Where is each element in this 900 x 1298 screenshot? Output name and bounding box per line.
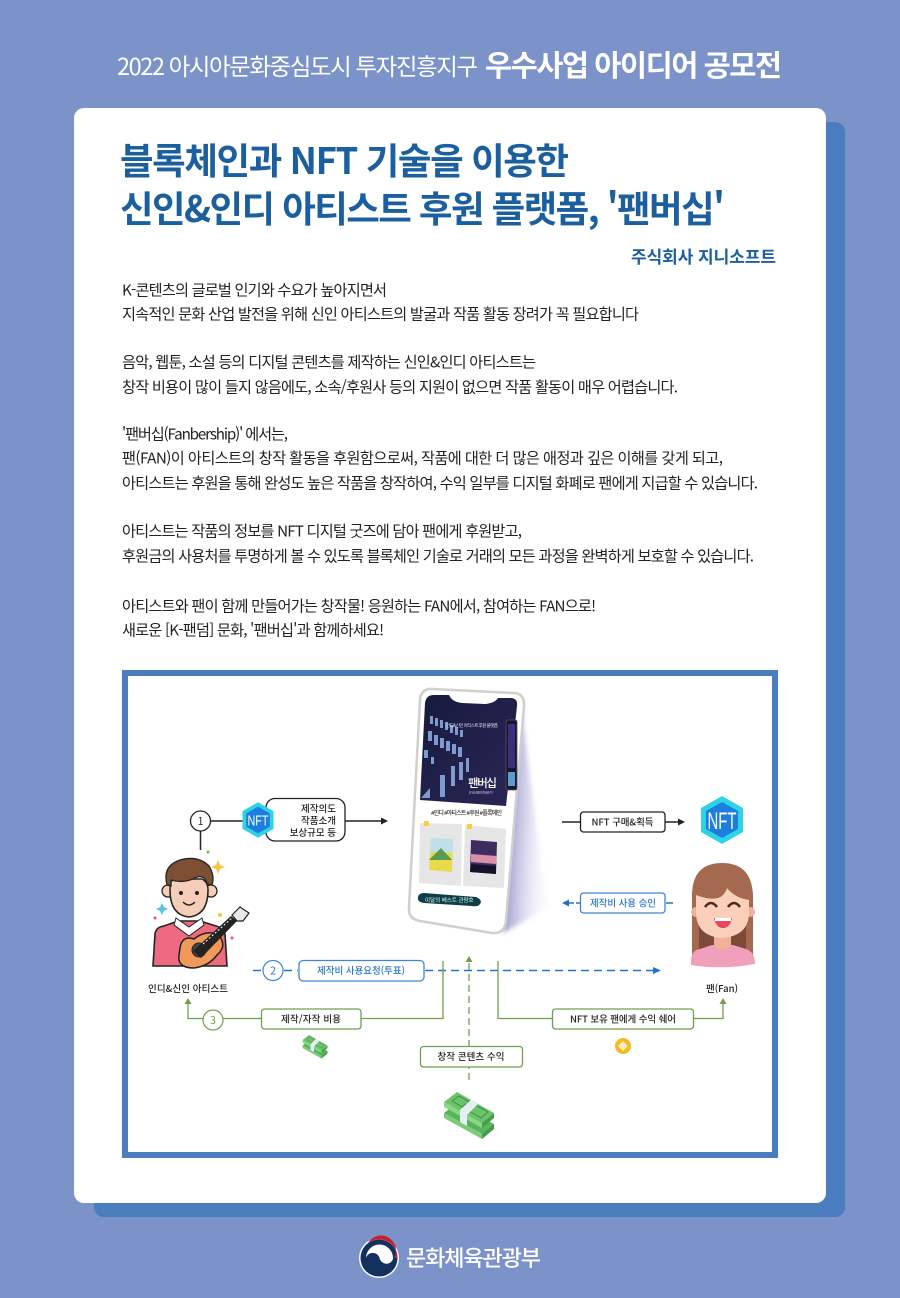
card shadow panel xyxy=(94,122,845,1217)
body text: 후원금의 사용처를 투명하게 볼 수 있도록 블록체인 기술로 거래의 모든 과정을 완벽하게 보호할 수 있습니다. xyxy=(122,544,754,566)
header title: 2022 아시아문화중심도시 투자진흥지구 xyxy=(117,48,478,82)
phone mockup: #인디 #아티스트 #후원 #플록메인 xyxy=(431,808,502,817)
icon: NFT hexagon: NFT xyxy=(708,808,737,835)
main white card xyxy=(74,108,826,1203)
step 1: artist to platform: 제작의도 xyxy=(301,801,336,815)
body text: 아티스트와 팬이 함께 만들어가는 창작물! 응원하는 FAN에서, 참여하는 FAN으로! xyxy=(122,594,596,616)
step 2: funding request xyxy=(253,960,661,981)
artist label: 인디&신인 아티스트 xyxy=(148,981,228,995)
body text: 팬(FAN)이 아티스트의 창작 활동을 후원함으로써, 작품에 대한 더 많은 애정과 깊은 이해를 갖게 되고, xyxy=(122,446,723,468)
step 1: artist to platform: NFT xyxy=(248,812,268,830)
approval label: 제작비 사용 승인 xyxy=(590,896,656,910)
footer logo xyxy=(359,1235,541,1278)
step 2: funding request: 2 xyxy=(270,964,276,978)
body text: 창작 비용이 많이 들지 않음에도, 소속/후원사 등의 지원이 없으면 작품 활동이 매우 어렵습니다. xyxy=(122,376,678,398)
step 1: artist to platform xyxy=(190,798,388,850)
icon: fan xyxy=(691,863,755,967)
company name: 주식회사 지니소프트 xyxy=(631,243,776,268)
step 3: production cost: 제작/자작 비용 xyxy=(281,1012,341,1026)
fan label: 팬(Fan) xyxy=(706,981,738,995)
step 1: artist to platform: 1 xyxy=(198,814,204,829)
article title: 블록체인과 NFT 기술을 이용한 xyxy=(120,132,569,185)
phone mockup: (FANBERSHIP) xyxy=(469,791,493,796)
step 1: artist to platform: 보상규모 등 xyxy=(290,825,336,839)
step 3: production cost: 3 xyxy=(210,1013,216,1028)
icon: coin xyxy=(615,1038,631,1054)
content revenue flow: 창작 콘텐츠 수익 xyxy=(438,1049,504,1063)
icon: NFT hexagon xyxy=(701,796,743,844)
header title xyxy=(117,43,782,85)
phone mockup: 이달의 베스트 관람호 xyxy=(425,896,474,904)
content revenue flow xyxy=(420,956,522,1080)
approval label xyxy=(562,893,673,913)
app cards xyxy=(419,821,506,888)
body text xyxy=(122,278,758,640)
article title xyxy=(120,132,725,233)
icon: small cash xyxy=(302,1035,328,1058)
NFT purchase xyxy=(562,812,685,832)
NFT purchase: NFT 구매&획득 xyxy=(592,814,654,828)
body text: 새로운 [K-팬덤] 문화, '팬버십'과 함께하세요! xyxy=(122,618,384,640)
phone mockup: 인디&신인 아티스트 후원 플랫폼 xyxy=(446,722,498,729)
NFT holder revenue share xyxy=(498,961,726,1029)
icon: artist with guitar xyxy=(153,850,249,968)
footer logo: 문화체육관광부 xyxy=(406,1241,541,1273)
step 3: production cost xyxy=(184,961,443,1030)
body text: K-콘텐츠의 글로벌 인기와 수요가 높아지면서 xyxy=(122,278,387,300)
phone mockup xyxy=(409,689,547,933)
body text: 아티스트는 후원을 통해 완성도 높은 작품을 창작하여, 수익 일부를 디지털 화폐로 팬에게 지급할 수 있습니다. xyxy=(122,472,758,494)
diagram frame xyxy=(125,673,775,1155)
body text: 지속적인 문화 산업 발전을 위해 신인 아티스트의 발굴과 작품 활동 장려가 꼭 필요합니다 xyxy=(122,302,639,324)
body text: 음악, 웹툰, 소설 등의 디지털 콘텐츠를 제작하는 신인&인디 아티스트는 xyxy=(122,350,536,372)
step 2: funding request: 제작비 사용요청(투표) xyxy=(317,963,405,977)
step 1: artist to platform: 작품소개 xyxy=(301,813,336,827)
icon: government emblem xyxy=(359,1235,399,1278)
body text: '팬버십(Fanbership)' 에서는, xyxy=(122,422,288,444)
article title: 신인&인디 아티스트 후원 플랫폼, '팬버십' xyxy=(120,180,725,233)
app button xyxy=(418,893,481,906)
app logo text: 팬버십 xyxy=(468,775,497,791)
NFT holder revenue share: NFT 보유 팬에게 수익 쉐어 xyxy=(570,1012,676,1026)
body text: 아티스트는 작품의 정보를 NFT 디지털 굿즈에 담아 팬에게 후원받고, xyxy=(122,520,522,542)
header title: 우수사업 아이디어 공모전 xyxy=(485,43,782,85)
icon: large cash xyxy=(444,1092,494,1139)
